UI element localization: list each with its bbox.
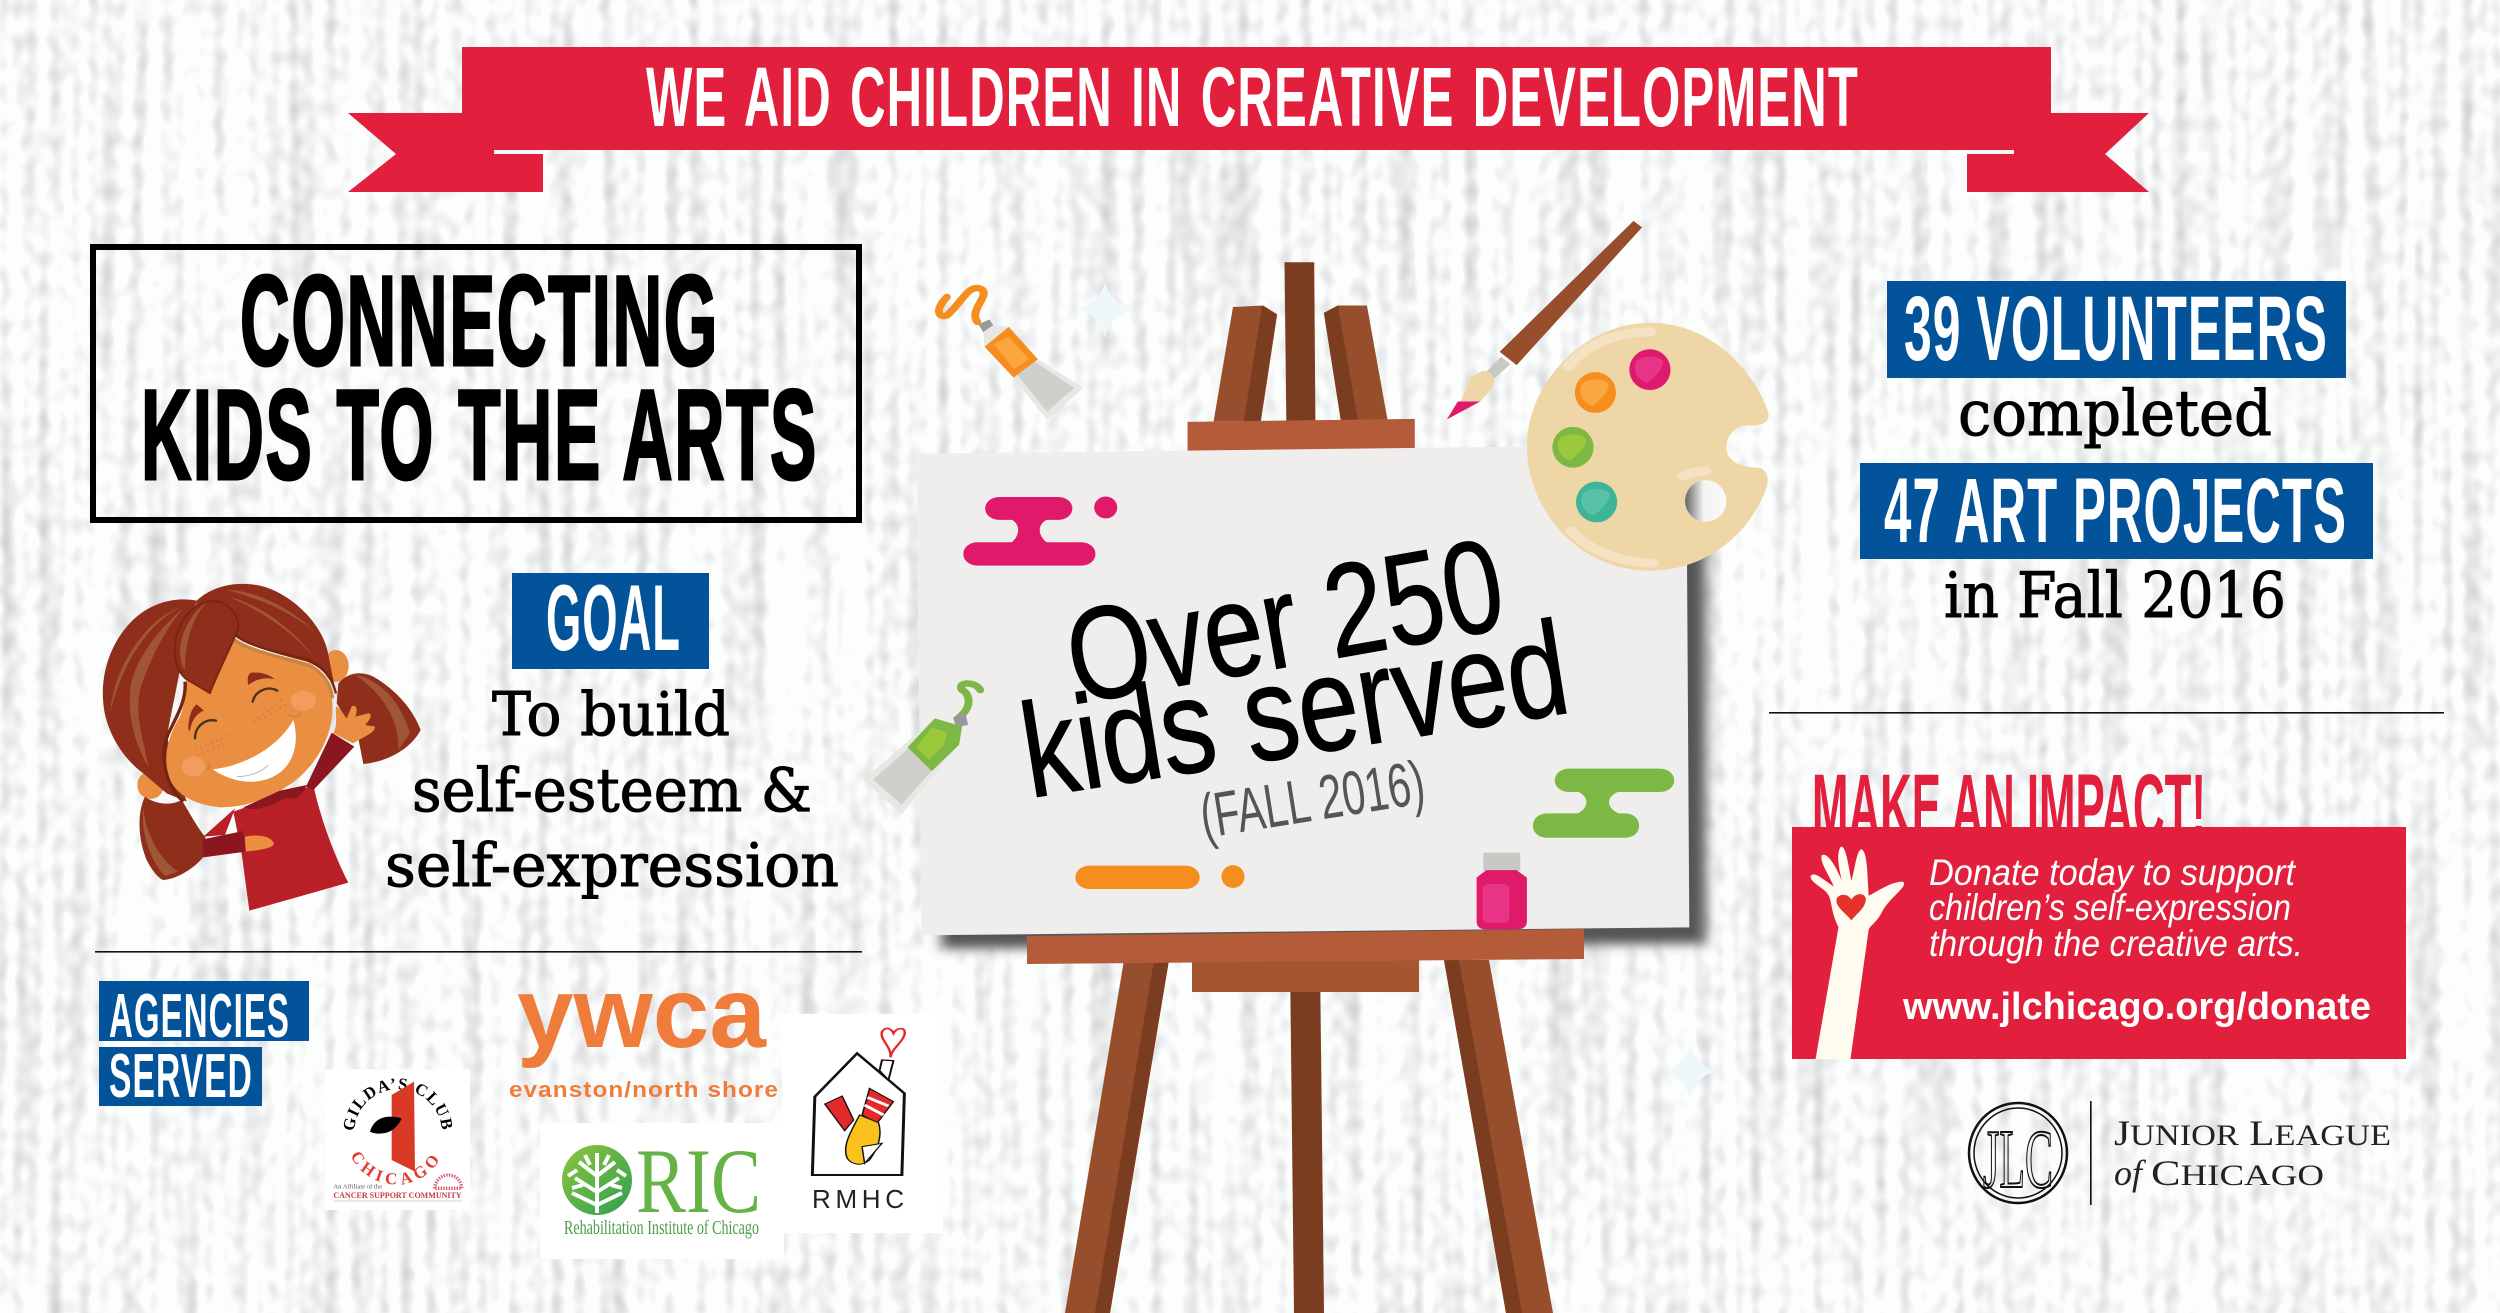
in fall 2016 text: in Fall 2016 (1944, 559, 2286, 632)
headline text: KIDS TO THE ARTS (141, 364, 818, 507)
logo: RMHC: RMHC (812, 1184, 904, 1214)
agencies served label: SERVED (109, 1042, 253, 1111)
icon: paint bottle (1477, 853, 1527, 929)
goal text: To build (492, 680, 730, 750)
paint blob: pink (963, 497, 1117, 566)
canvas text: Over 250 kids served (1011, 510, 1578, 827)
headline text: CONNECTING (240, 250, 719, 393)
logo: RMHC (782, 1014, 943, 1233)
logo: Junior League of Chicago (1969, 1101, 2391, 1206)
easel top posts (1188, 262, 1415, 451)
goal label: GOAL (546, 565, 681, 670)
canvas text: Over 250 kids served: Over 250 (1055, 510, 1514, 732)
icon: smiling girl (103, 584, 421, 911)
logo: Gilda's Club Chicago (325, 1070, 470, 1210)
donate text: through the creative arts. (1929, 923, 2303, 964)
goal text: self-esteem & (412, 756, 812, 826)
easel lower shelf (1027, 929, 1584, 992)
easel and canvas (863, 221, 1769, 949)
logo: Junior League of Chicago: CHICAGO (2151, 1153, 2324, 1193)
paint blob: green (1533, 769, 1674, 838)
logo: Rehabilitation Institute of Chicago: RIC (636, 1130, 761, 1232)
logo: Junior League of Chicago: of (2114, 1153, 2147, 1193)
canvas text: Over 250 kids served: kids served (1011, 593, 1578, 827)
goal text: self-expression (385, 831, 839, 901)
icon: orange paint tube (939, 288, 1083, 420)
goal label (512, 565, 709, 670)
icon: paint brush (1447, 221, 1642, 419)
icon: green paint tube (863, 683, 980, 814)
logo: ywca evanston/north shore: evanston/north shore (509, 1077, 779, 1102)
logo: Rehabilitation Institute of Chicago: Rehabilitation Institute of Chicago (564, 1217, 759, 1239)
agencies served label (99, 981, 309, 1111)
logo: Gilda's Club Chicago: CANCER SUPPORT COMMUNITY (333, 1191, 462, 1200)
donate text (1929, 852, 2303, 964)
agencies served label: AGENCIES (109, 982, 290, 1051)
paint blob: orange (1075, 865, 1245, 889)
completed text: completed (1958, 377, 2272, 450)
logo: Gilda's Club Chicago: CHICAGO (352, 1152, 438, 1185)
volunteers stat (1887, 278, 2346, 450)
icon: hand with heart (1811, 847, 1904, 1059)
logo: ywca evanston/north shore (509, 957, 779, 1102)
donate text: children’s self-expression (1929, 887, 2291, 928)
logo: ywca evanston/north shore: ywca (517, 957, 767, 1069)
logo: Rehabilitation Institute of Chicago (540, 1123, 784, 1259)
canvas (917, 445, 1689, 935)
logo: Junior League of Chicago: JUNIOR LEAGUE (2114, 1113, 2391, 1153)
art projects stat (1860, 460, 2373, 632)
icon: palette (1527, 323, 1769, 571)
donate text: Donate today to support (1929, 852, 2297, 893)
headline text (141, 250, 818, 507)
donate url: www.jlchicago.org/donate (1902, 986, 2371, 1028)
logo: Gilda's Club Chicago: An Affiliate of the (333, 1184, 382, 1191)
easel legs (1065, 960, 1553, 1313)
headline box (93, 247, 859, 520)
decorative sparkles (1075, 283, 1716, 1098)
banner ribbon (348, 47, 2149, 192)
logo: Junior League of Chicago: JLC (1983, 1113, 2053, 1206)
logo: Gilda's Club Chicago: GILDA’S CLUB (344, 1078, 452, 1130)
donate panel (1792, 756, 2406, 1059)
canvas text: fall 2016: (FALL 2016) (1195, 748, 1429, 852)
goal text (385, 680, 839, 901)
